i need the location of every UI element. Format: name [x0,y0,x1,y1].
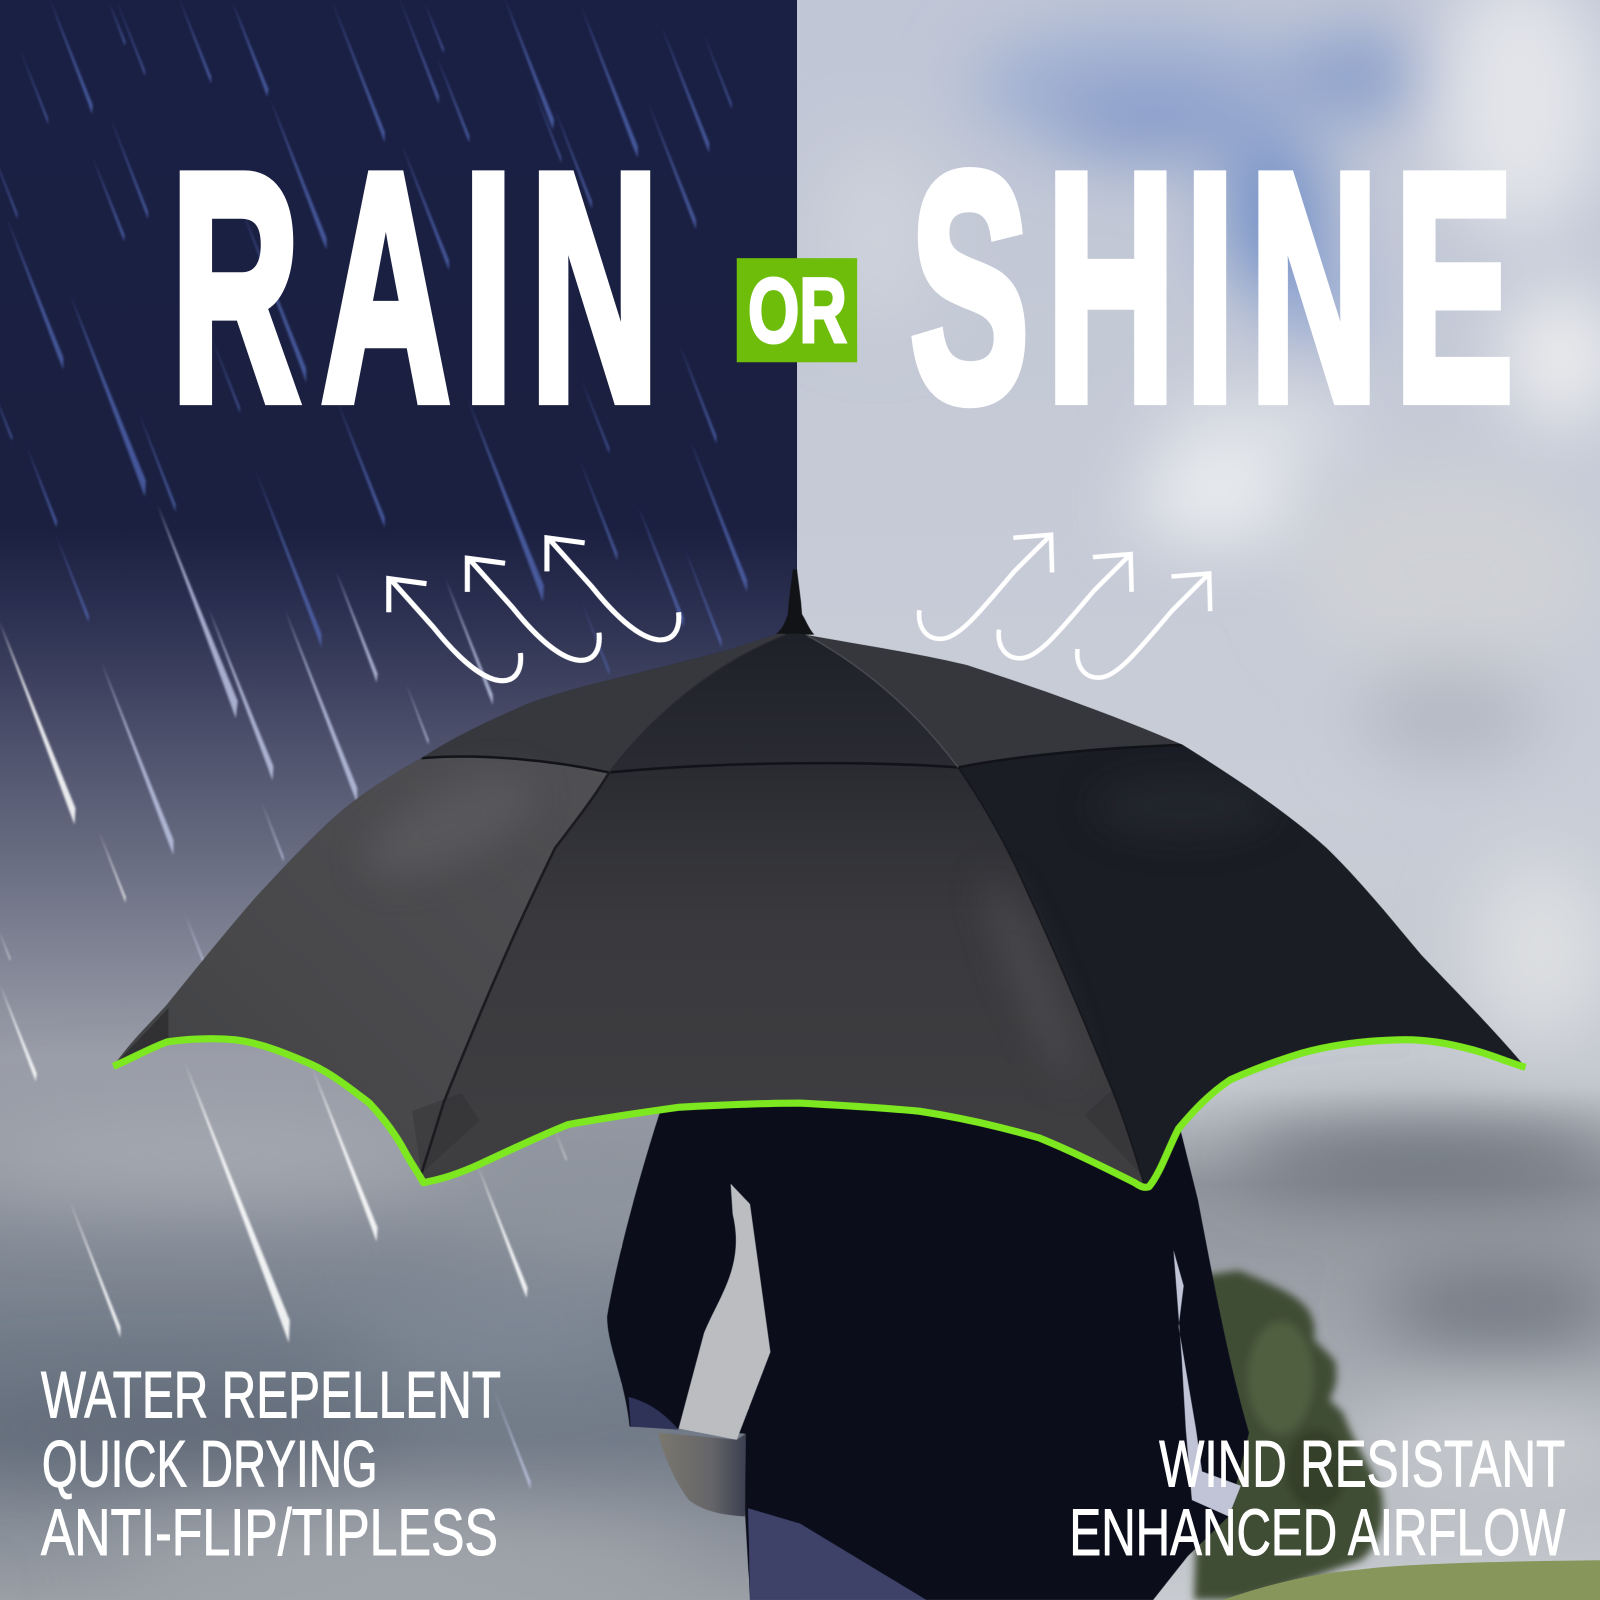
grey side panel [679,1184,770,1440]
forearm [658,1433,746,1516]
title: RAIN: RAIN [171,108,659,468]
right panel [1182,745,1522,1062]
grass [1222,1560,1600,1600]
features: shine [1069,1428,1566,1570]
person [607,1102,1249,1600]
green edge trim [113,1039,1526,1187]
panel: cloudy sky background [797,0,1600,1600]
highlight patches [382,782,1272,1036]
top right panel [808,635,1182,766]
features: rain: ANTI-FLIP/TIPLESS [41,1496,498,1570]
features: rain: WATER REPELLENT [41,1358,501,1432]
rain streaks [0,0,747,1490]
seam lines [421,635,1183,1187]
umbrella [0,510,1600,1327]
jacket [607,1102,1249,1600]
arrows: airflow left [389,538,679,681]
sleeve cuff [629,1397,679,1430]
right sliver [1173,1250,1241,1516]
features: rain [41,1358,501,1570]
panel: rainy sky background [0,0,816,1600]
ferrule [776,569,814,635]
canopy [0,510,1600,1327]
title: SHINE: SHINE [910,108,1513,468]
tip folds [412,1100,443,1168]
badge: OR: OR [748,260,847,362]
tree [1194,1270,1383,1600]
centre panel [422,764,1143,1183]
features: rain: QUICK DRYING [42,1428,378,1502]
top centre panel [612,742,956,770]
top left panel [424,634,786,771]
arrows: airflow right [919,535,1210,678]
left tip shadow [120,1008,168,1059]
lower shirt [748,1508,927,1600]
left panel [118,758,607,1171]
